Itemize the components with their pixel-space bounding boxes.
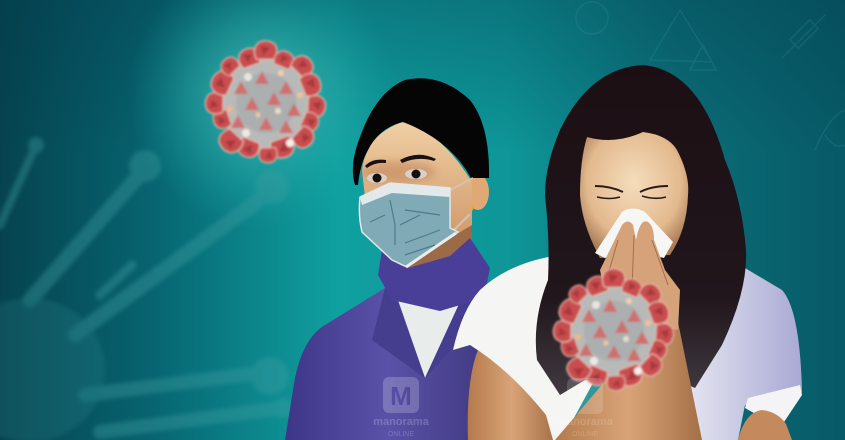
eyes [367,169,427,183]
watermark: manorama online: M [390,381,412,411]
watermark: second copy: manorama [557,416,614,428]
right lower arm [738,410,792,440]
black hair [353,78,489,185]
watermark: second copy: ONLINE [572,431,598,438]
watermark: manorama online [373,377,430,438]
face [362,122,472,262]
eyebrows [365,155,436,168]
jacket lapels [372,285,478,378]
virus: floating particle [205,41,326,163]
face [580,132,688,258]
virus: sneezed particle [553,269,674,391]
ear loop [450,178,473,232]
watermark: manorama online: ONLINE [388,431,414,438]
masked woman [285,78,490,440]
watermark: second copy [557,378,614,438]
watermark: manorama online: manorama [373,416,430,428]
long dark hair [536,65,746,395]
purple scarf [378,238,490,311]
ear and earring [466,174,489,212]
surgical mask [359,183,458,267]
white tissue [595,208,673,258]
left upper arm [468,350,556,440]
forearms [555,320,702,440]
closed eyes and brows [595,186,668,198]
faint medical icons at top right [576,2,845,150]
praying hands [600,221,680,330]
white blouse left [453,255,600,440]
ghost virus: large faint stalks at bottom left [0,137,293,440]
lavender blouse right [660,268,802,440]
eye shadow [360,161,436,183]
sneezing woman [453,65,802,440]
jacket [285,285,490,440]
neck [392,215,474,270]
white shirt collar [398,300,460,378]
